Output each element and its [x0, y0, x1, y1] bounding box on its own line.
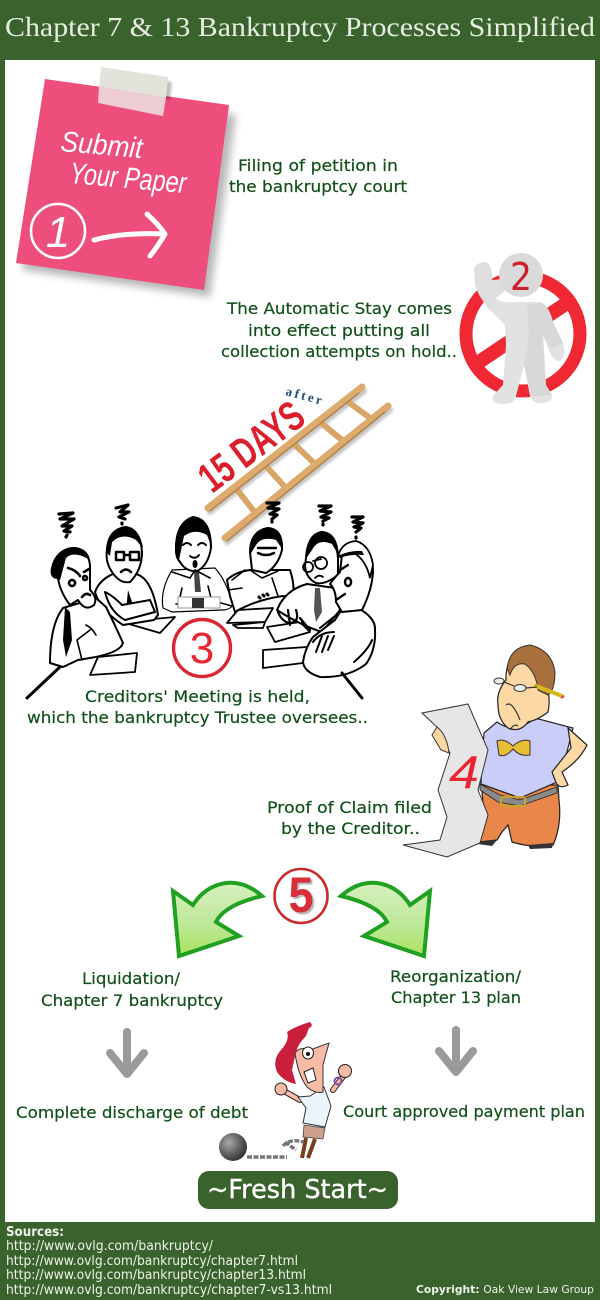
icon: number 1 in circle — [31, 204, 85, 258]
step 2 text: collection attempts on hold.. — [221, 342, 457, 361]
right outcome text: Court approved payment plan — [343, 1102, 585, 1121]
note handwriting — [59, 126, 189, 200]
icon: ball — [219, 1133, 247, 1161]
left outcome text: Complete discharge of debt — [16, 1103, 248, 1122]
sources list: http://www.ovlg.com/bankruptcy/chapter13.html — [6, 1268, 306, 1283]
person 2 — [95, 527, 158, 625]
icon: tape — [98, 67, 172, 116]
head — [498, 652, 549, 730]
freed woman with ball and chain — [219, 1022, 352, 1161]
icon: ladder — [208, 387, 390, 542]
left branch heading: Chapter 7 bankruptcy — [41, 991, 223, 1010]
right branch heading: Chapter 13 plan — [391, 988, 521, 1007]
step 1 text: the bankruptcy court — [229, 177, 407, 196]
note handwriting: Submit — [59, 126, 146, 165]
step 2 text — [221, 299, 457, 361]
step 3 text: which the bankruptcy Trustee oversees.. — [27, 708, 368, 727]
person 4 — [227, 527, 294, 612]
copyright: Copyright: Oak View Law Group — [416, 1284, 594, 1296]
step 2: prohibition sign with figure — [466, 253, 580, 404]
step 2 text: The Automatic Stay comes — [226, 299, 452, 318]
legs — [302, 1138, 315, 1158]
step number 2: 2 — [510, 255, 532, 299]
skirt — [303, 1125, 325, 1139]
icon: left green arrow — [173, 883, 262, 956]
icon: right green arrow — [341, 883, 430, 956]
arms — [282, 1074, 345, 1100]
icon: chain — [247, 1141, 303, 1157]
step number 5 badge: 5 — [290, 869, 316, 925]
hair — [275, 1022, 312, 1084]
belt — [480, 784, 557, 806]
icon: right gray arrow — [439, 1030, 473, 1072]
blouse — [298, 1087, 331, 1127]
person 6 — [303, 541, 375, 698]
step 4: creditor with long claim paper — [403, 645, 587, 857]
thought scribbles — [59, 503, 363, 538]
hair — [507, 645, 555, 695]
right branch heading: Reorganization/ — [390, 967, 522, 986]
person 1 — [50, 547, 123, 667]
left branch heading — [41, 969, 223, 1010]
sources list — [6, 1225, 332, 1298]
face — [302, 1047, 316, 1083]
step number 3 badge — [174, 620, 230, 676]
person 5 — [277, 531, 340, 632]
fists — [275, 1064, 352, 1095]
note handwriting: Your Paper — [68, 157, 189, 200]
step number 5 badge: 5 — [288, 867, 314, 923]
step 3 text: Creditors' Meeting is held, — [85, 687, 310, 706]
figure — [474, 253, 564, 404]
paper — [403, 704, 488, 857]
right branch heading — [390, 967, 522, 1007]
right arm — [552, 728, 587, 787]
icon: left gray arrow — [110, 1032, 144, 1074]
15 days label: 15 DAYS — [189, 391, 313, 501]
step 4 text: by the Creditor.. — [281, 819, 420, 838]
papers — [90, 608, 310, 675]
step 4 text: Proof of Claim filed — [267, 798, 432, 817]
step 4 text — [267, 798, 432, 838]
step 1: sticky note — [16, 67, 236, 297]
sources list: http://www.ovlg.com/bankruptcy/chapter7-vs13.html — [6, 1283, 332, 1298]
step number 4: 4 — [449, 746, 479, 798]
step number 5 badge — [274, 867, 328, 925]
left branch heading: Liquidation/ — [82, 969, 181, 988]
table edge — [27, 660, 72, 698]
step 1 text — [229, 156, 407, 196]
sources list: http://www.ovlg.com/bankruptcy/chapter7.html — [6, 1254, 298, 1269]
person 3 — [162, 516, 233, 612]
pants — [479, 785, 560, 846]
step 2 text: into effect putting all — [248, 321, 430, 340]
icon: arrow — [94, 214, 165, 256]
step 3 text — [27, 687, 368, 727]
glasses and pencil — [494, 678, 563, 730]
step 1 text: Filing of petition in — [238, 156, 398, 175]
fresh start button: ~Fresh Start~ — [207, 1175, 388, 1205]
head — [295, 1043, 329, 1092]
sources list: http://www.ovlg.com/bankruptcy/ — [6, 1239, 214, 1254]
step number 3 badge: 3 — [190, 624, 214, 673]
step 3: creditors meeting cartoon — [27, 503, 375, 698]
shirt — [481, 718, 573, 798]
ladder with 15 days label — [189, 383, 390, 542]
after label: after — [284, 383, 324, 408]
sources list: Sources: — [6, 1225, 64, 1240]
bow tie — [497, 740, 530, 756]
title: Chapter 7 & 13 Bankruptcy Processes Simplified — [5, 12, 596, 42]
icon: number 1 in circle: 1 — [46, 208, 70, 257]
